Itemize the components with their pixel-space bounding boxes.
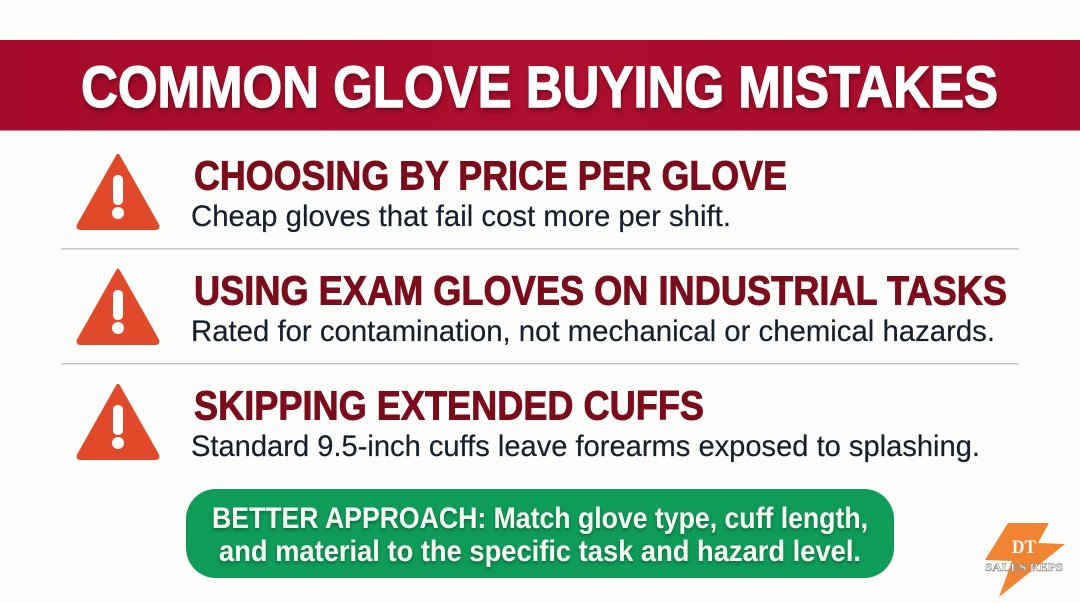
callout: better approach	[186, 489, 894, 578]
logo text: DT: DT	[1012, 537, 1036, 558]
text: callout line 1: BETTER APPROACH: Match glove type, cuff length,	[212, 502, 868, 535]
icon: warning triangle 1	[79, 156, 157, 228]
icon: warning triangle 2	[79, 271, 157, 343]
icon: DT Sales Reps logo	[985, 523, 1065, 597]
heading: mistake 3: SKIPPING EXTENDED CUFFS	[194, 382, 704, 428]
panel: mistake 1	[79, 152, 787, 233]
text: mistake 3 detail: Standard 9.5-inch cuffs leave forearms exposed to splashing.	[191, 430, 980, 463]
title banner	[0, 40, 1080, 130]
logo text: Sales Reps: SALES REPS	[985, 560, 1063, 574]
heading: mistake 1: CHOOSING BY PRICE PER GLOVE	[194, 152, 787, 198]
panel: mistake 2	[79, 268, 1007, 348]
text: callout line 2: and material to the specific task and hazard level.	[219, 535, 861, 568]
panel: mistake 3	[79, 382, 980, 463]
text: mistake 1 detail: Cheap gloves that fail cost more per shift.	[191, 200, 731, 233]
icon: warning triangle 3	[79, 386, 157, 458]
text: mistake 2 detail: Rated for contamination, not mechanical or chemical hazards.	[191, 315, 995, 348]
